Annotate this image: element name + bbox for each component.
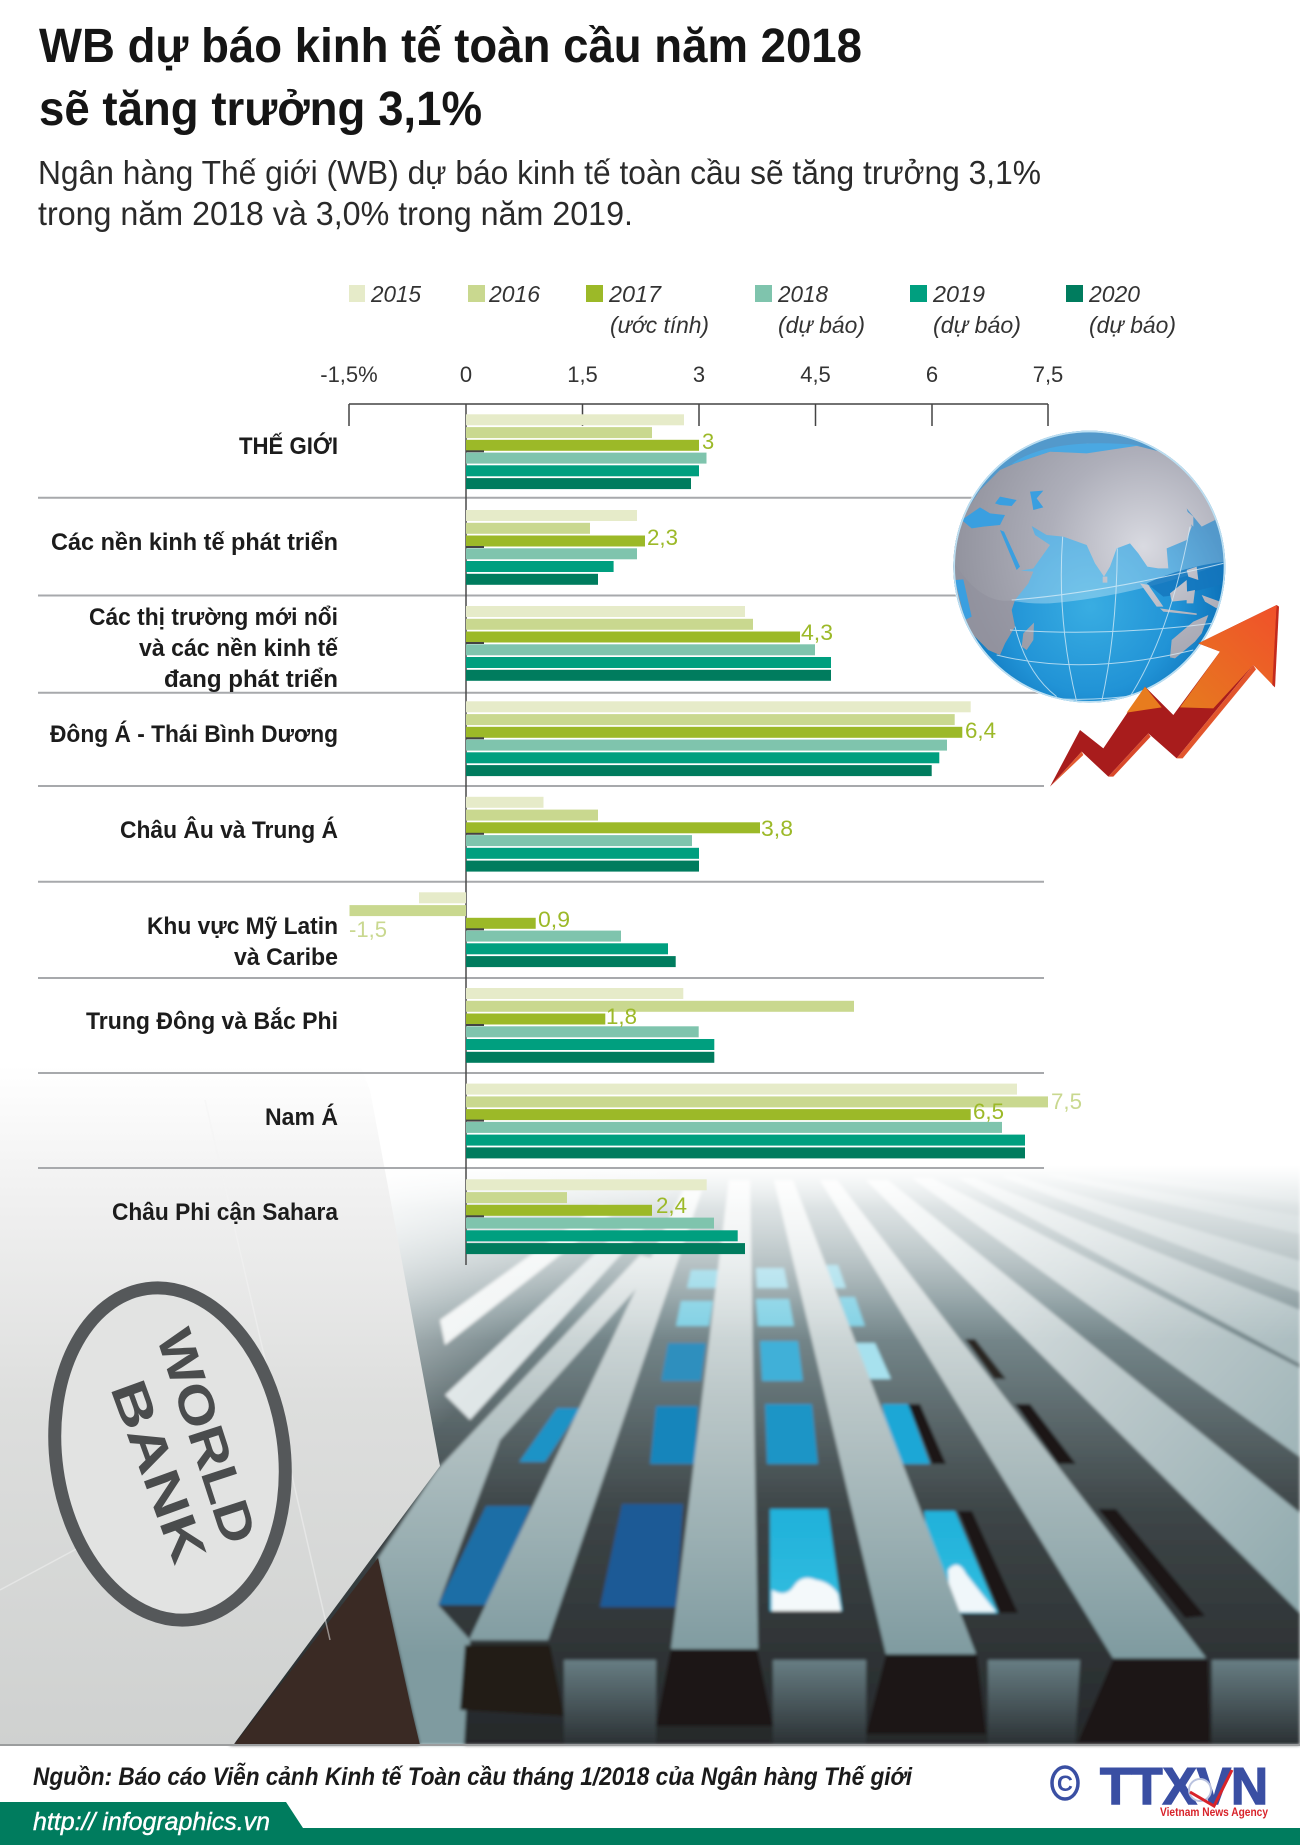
gloss over sea (964, 430, 1225, 604)
row: Thế giới (239, 414, 714, 489)
row: Khu vực Mỹ Latin và Caribe (147, 892, 676, 971)
value: 2017: 0,9 (538, 907, 570, 932)
value: 2016: -1,5 (349, 917, 387, 942)
legend: 2020 (1088, 281, 1140, 307)
footer url: http:// infographics.vn (33, 1808, 270, 1836)
logo: TTXVN: TTXVN (1100, 1758, 1268, 1816)
logo: TTXVN: C (1057, 1771, 1073, 1796)
row: Châu Âu và Trung Á (120, 797, 793, 872)
row: Trung Đông và Bắc Phi (86, 988, 854, 1063)
bars (466, 988, 854, 1063)
legend (349, 281, 1176, 338)
value: 2017: 6,5 (973, 1099, 1004, 1124)
logo: World Bank ring (34, 1273, 306, 1635)
islands and south lands (1022, 508, 1220, 658)
row: Châu Âu và Trung Á: Châu Âu và Trung Á (120, 816, 338, 844)
logo: TTXVN: Vietnam News Agency (1160, 1805, 1268, 1819)
legend: (dự báo) (933, 312, 1021, 338)
title: WB dự báo kinh tế toàn cầu năm 2018 (39, 20, 862, 73)
title: sẽ tăng trưởng 3,1% (39, 83, 482, 136)
row: Đông Á - Thái Bình Dương (50, 701, 996, 776)
legend: 2018 (777, 281, 828, 307)
darker band at right (1147, 562, 1225, 597)
logo: World Bank ring: WORLD (146, 1322, 267, 1551)
icon: rising arrow (1050, 605, 1279, 787)
axis: 7,5 (1033, 362, 1063, 387)
graticule (997, 527, 1223, 702)
icon: globe (950, 420, 1230, 707)
legend: 2019 (932, 281, 985, 307)
bars (466, 701, 971, 776)
value: 3 (702, 429, 714, 454)
row: Các thị trường mới nổi: Các thị trường mới nổi (89, 604, 338, 631)
value: 3,8 (761, 816, 793, 841)
legend: (dự báo) (1089, 312, 1176, 338)
row: Các nền kinh tế phát triển: Các nền kinh tế phát triển (51, 529, 338, 556)
axis: 1,5 (567, 362, 598, 387)
logo: World Bank ring: BANK (100, 1373, 217, 1570)
row: Châu Phi cận Sahara (112, 1179, 745, 1254)
land: Eurasia and Africa (952, 443, 1215, 655)
row: Các thị trường mới nổi: đang phát triển (164, 666, 338, 693)
top fade overlay (230, 1160, 1300, 1340)
axis: 4,5 (800, 362, 831, 387)
subtitle text block: Ngân hàng Thế giới (WB) dự báo kinh tế toàn cầu sẽ tăng trưởng 3,1% (38, 154, 1041, 191)
bars (466, 510, 645, 585)
bars (466, 414, 706, 489)
stone wall (0, 1065, 440, 1744)
row: Khu vực Mỹ Latin và Caribe: và Caribe (234, 944, 338, 971)
title (39, 20, 862, 136)
left fade overlay (360, 1165, 700, 1520)
bars (466, 797, 760, 872)
lower land shade (974, 600, 1015, 655)
row: Khu vực Mỹ Latin và Caribe: Khu vực Mỹ Latin (147, 913, 338, 940)
dark recess under wall (234, 1558, 420, 1745)
bars (466, 606, 831, 681)
value: 6,4 (965, 718, 996, 743)
bars (466, 1179, 745, 1254)
legend: (dự báo) (778, 312, 865, 338)
legend: 2017 (608, 281, 662, 307)
axis: -1,5% (320, 362, 378, 387)
axis: 3 (693, 362, 705, 387)
row: Trung Đông và Bắc Phi: Trung Đông và Bắc Phi (86, 1007, 338, 1035)
source note: Nguồn: Báo cáo Viễn cảnh Kinh tế Toàn cầu tháng 1/2018 của Ngân hàng Thế giới (33, 1762, 913, 1791)
axis: 6 (926, 362, 938, 387)
row: Đông Á - Thái Bình Dương: Đông Á - Thái Bình Dương (50, 720, 338, 748)
value: 2,3 (647, 525, 678, 550)
value: 4,3 (801, 620, 833, 645)
axis: 0 (460, 362, 472, 387)
separators (38, 498, 1045, 1168)
row: Thế giới: THẾ GIỚI (239, 432, 338, 460)
row: Nam Á (265, 1084, 1082, 1158)
legend: 2015 (370, 281, 421, 307)
arctic blue (1012, 443, 1140, 464)
value: 1,8 (606, 1004, 637, 1029)
axis (320, 362, 1063, 1265)
row: Các thị trường mới nổi: và các nền kinh tế (139, 635, 339, 662)
value: 2,4 (656, 1193, 687, 1218)
seas (955, 491, 1043, 620)
footer green band (0, 1802, 1300, 1845)
building facade (230, 1165, 1300, 1745)
bars (350, 892, 676, 967)
value: 2016: 7,5 (1051, 1089, 1082, 1114)
legend: (ước tính) (610, 312, 709, 338)
background photo: World Bank building (0, 1065, 1300, 1746)
bars (466, 1084, 1048, 1158)
legend: 2016 (488, 281, 540, 307)
row: Các thị trường mới nổi (89, 604, 833, 693)
row: Các nền kinh tế phát triển (51, 510, 678, 585)
subtitle text block (38, 154, 1041, 232)
photo bottom edge (0, 1744, 1300, 1746)
row: Nam Á: Nam Á (265, 1103, 338, 1131)
row: Châu Phi cận Sahara: Châu Phi cận Sahara (112, 1199, 339, 1226)
wall joint lines (0, 1100, 330, 1640)
subtitle text block: trong năm 2018 và 3,0% trong năm 2019. (38, 195, 633, 232)
